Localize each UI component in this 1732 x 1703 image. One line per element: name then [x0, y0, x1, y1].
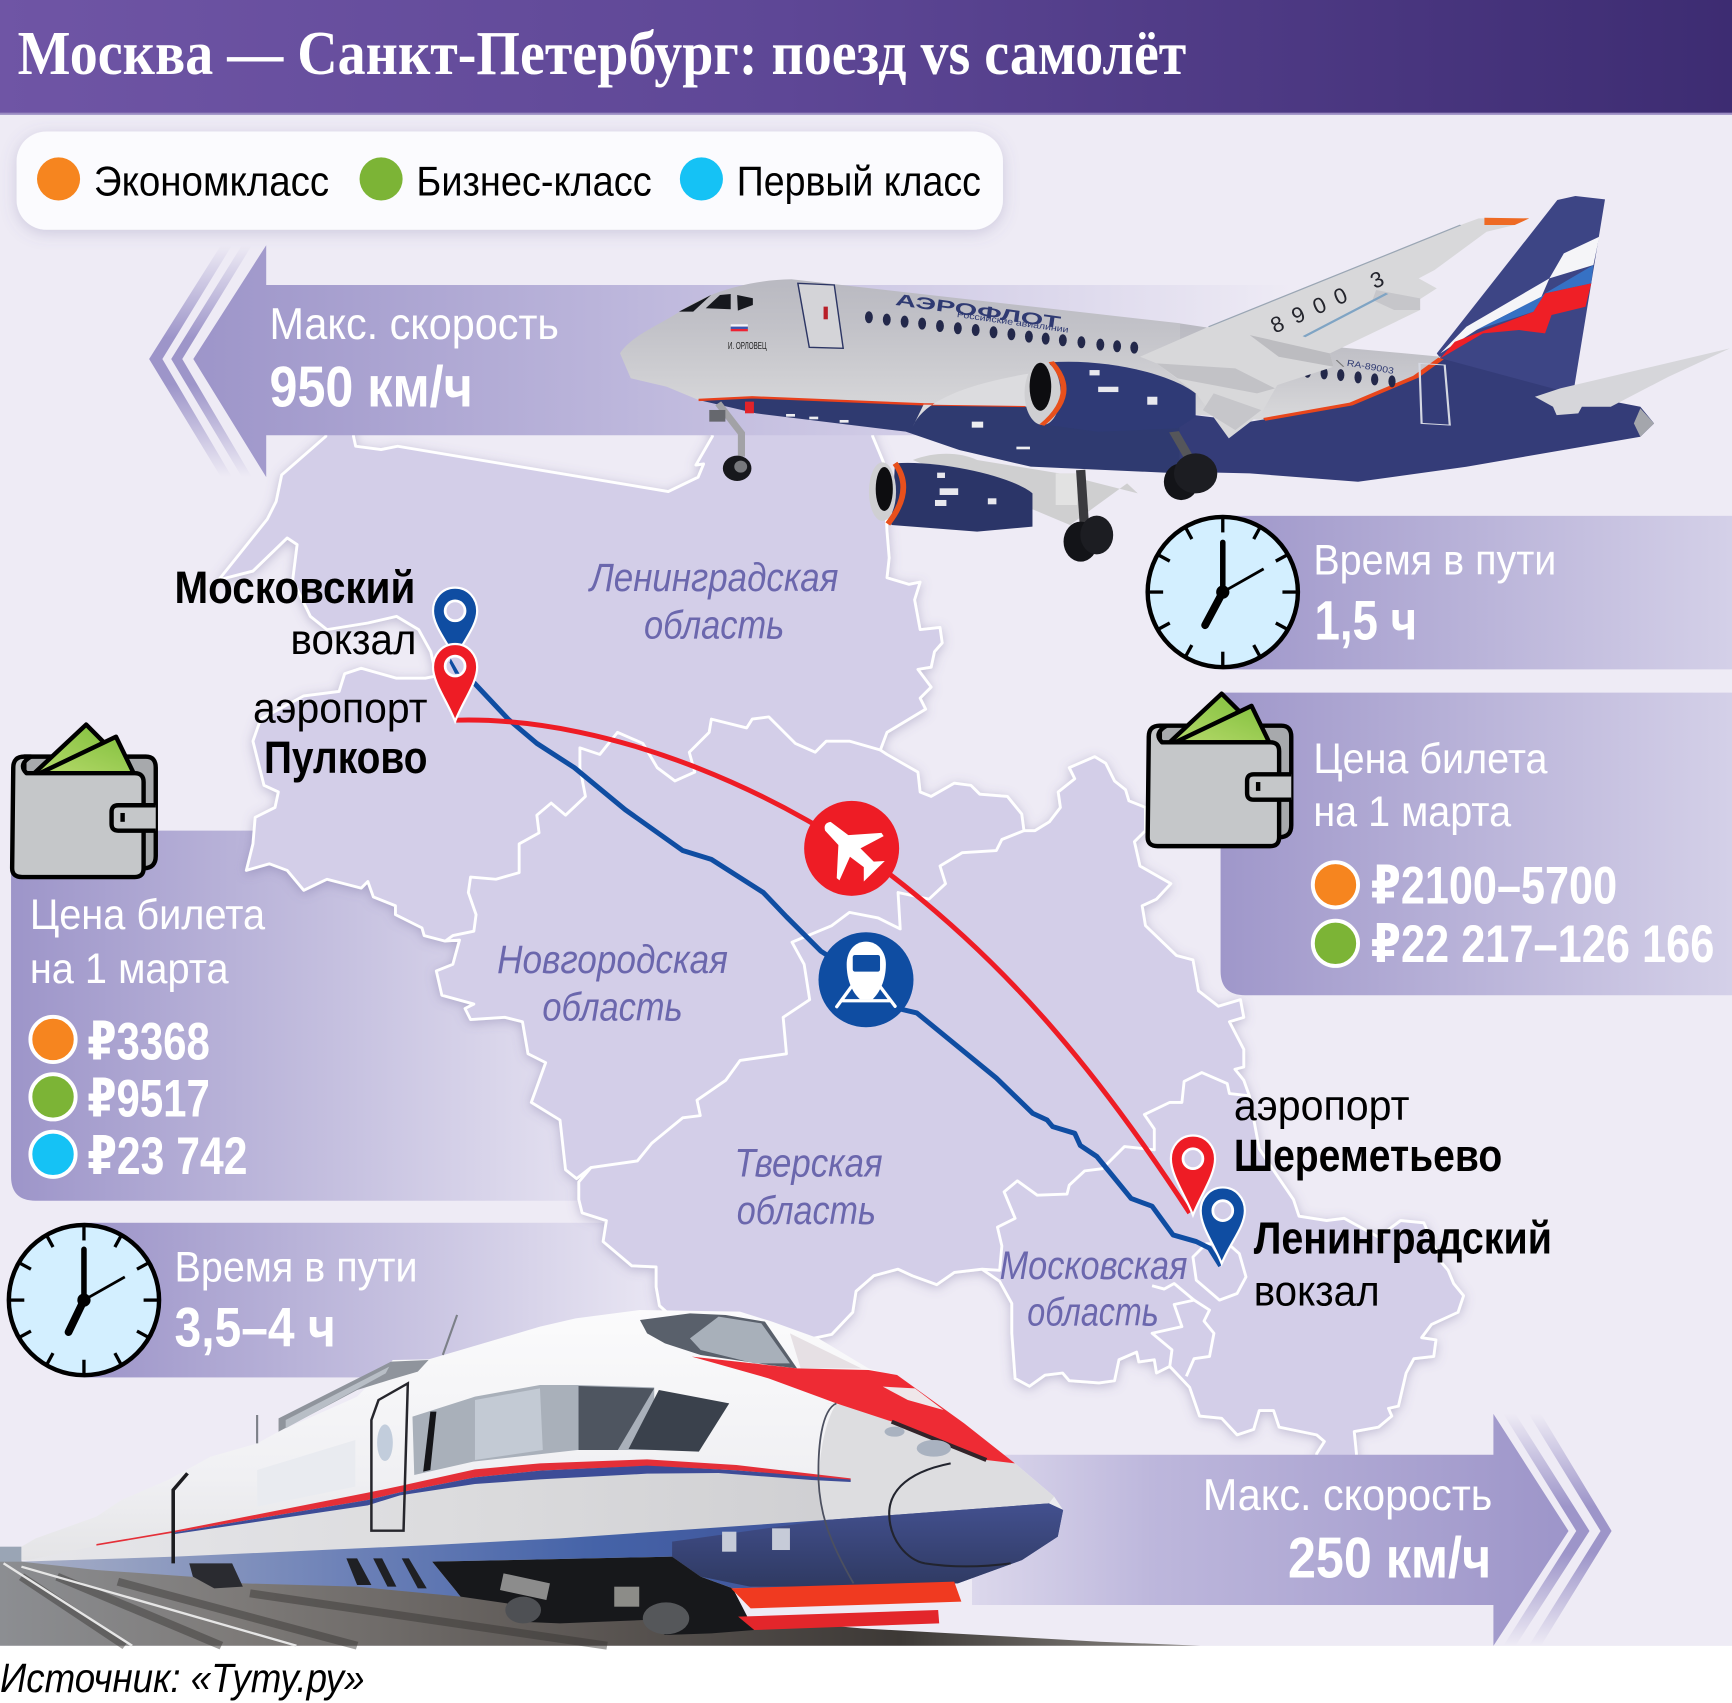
panel: train ticket price: ₽3368 [87, 1012, 210, 1071]
arrow: train max speed [972, 1414, 1612, 1646]
panel: train travel time: Время в пути [175, 1243, 418, 1291]
map labels: область [1027, 1291, 1159, 1335]
plane lettering: Российские авиалинии [956, 309, 1069, 335]
icon: train in blue circle [819, 932, 913, 1027]
label: Leningradsky station: вокзал [1254, 1268, 1380, 1316]
photo: plane [620, 196, 1730, 562]
label: Sheremetyevo: Шереметьево [1234, 1130, 1502, 1181]
plane front section [620, 279, 1180, 562]
icon: clock left [9, 1225, 159, 1375]
label: Leningradsky station: Ленинградский [1254, 1213, 1552, 1264]
panel: train ticket price: на 1 марта [30, 945, 229, 993]
plane lettering: И. ОРЛОВЕЦ [728, 341, 767, 352]
legend: Экономкласс [94, 158, 329, 205]
map labels: область [644, 603, 784, 647]
icon: plane in red circle [804, 801, 899, 896]
label: Sheremetyevo: аэропорт [1234, 1082, 1409, 1130]
map labels: область [737, 1189, 876, 1233]
route: train [474, 683, 1221, 1266]
source note: Источник: «Туту.ру» [0, 1655, 365, 1701]
title bar: Москва — Санкт-Петербург: поезд vs самолёт [18, 18, 1186, 88]
arrow: train max speed: Макс. скорость [1203, 1471, 1492, 1520]
plane rear section [1180, 196, 1730, 482]
panel: train ticket price: Цена билета [30, 891, 265, 939]
panel: train ticket price [11, 831, 619, 1201]
map labels: Ленинградская [587, 556, 838, 600]
panel: train travel time [84, 1223, 658, 1377]
map of regions [219, 420, 1464, 1469]
label: Moskovsky station: вокзал [291, 616, 416, 664]
label: Sheremetyevo [1234, 1082, 1502, 1181]
pin: Moskovsky station [433, 588, 477, 658]
plane lettering: RA-89003 [1346, 358, 1395, 376]
map labels: Московская [1000, 1244, 1187, 1288]
panel: train travel time: 3,5–4 ч [175, 1296, 336, 1358]
arrow: plane max speed [149, 245, 1292, 477]
map labels [497, 556, 1187, 1335]
panel: plane ticket price [1221, 693, 1732, 995]
icon: wallet left [12, 725, 156, 877]
label: Pulkovo: аэропорт [253, 684, 427, 732]
photo: train [0, 1310, 1201, 1646]
label: Moskovsky station: Московский [175, 562, 415, 613]
map labels: область [542, 986, 683, 1030]
panel: plane travel time: 1,5 ч [1314, 590, 1417, 652]
arrow: train max speed: 250 км/ч [1288, 1526, 1491, 1590]
panel: plane ticket price: ₽2100–5700 [1371, 857, 1617, 916]
panel: train ticket price: ₽9517 [87, 1070, 210, 1129]
panel: plane travel time: Время в пути [1313, 536, 1556, 584]
map labels: Новгородская [497, 938, 728, 982]
legend: Бизнес-класс [416, 158, 652, 205]
panel: train ticket price: ₽23 742 [87, 1127, 247, 1186]
train body [21, 1310, 1063, 1588]
title bar [0, 0, 1732, 115]
panel: plane travel time [1223, 516, 1732, 669]
pin: Sheremetyevo airport [1171, 1136, 1215, 1215]
pin: Leningradsky station [1201, 1187, 1245, 1264]
plane lettering: 8900 3 [1267, 266, 1388, 338]
plane lettering: АЭРОФЛОТ [894, 290, 1062, 332]
icon: wallet right [1148, 694, 1291, 846]
plane wing and near engine [1025, 218, 1529, 500]
plane lettering [728, 266, 1395, 376]
label: Moskovsky station [175, 562, 416, 664]
arrow: plane max speed: 950 км/ч [270, 355, 473, 419]
pin: Pulkovo airport [433, 644, 477, 721]
panel: plane ticket price: на 1 марта [1313, 788, 1511, 836]
label: Pulkovo [253, 684, 427, 783]
legend: Первый класс [737, 158, 981, 205]
panel: plane ticket price: Цена билета [1313, 735, 1548, 783]
label: Pulkovo: Пулково [264, 732, 427, 783]
route: plane [456, 720, 1190, 1213]
arrow: plane max speed: Макс. скорость [270, 300, 559, 349]
icon: clock right [1148, 517, 1298, 667]
map labels: Тверская [735, 1141, 883, 1185]
label: Leningradsky station [1254, 1213, 1552, 1316]
legend [17, 131, 1003, 230]
